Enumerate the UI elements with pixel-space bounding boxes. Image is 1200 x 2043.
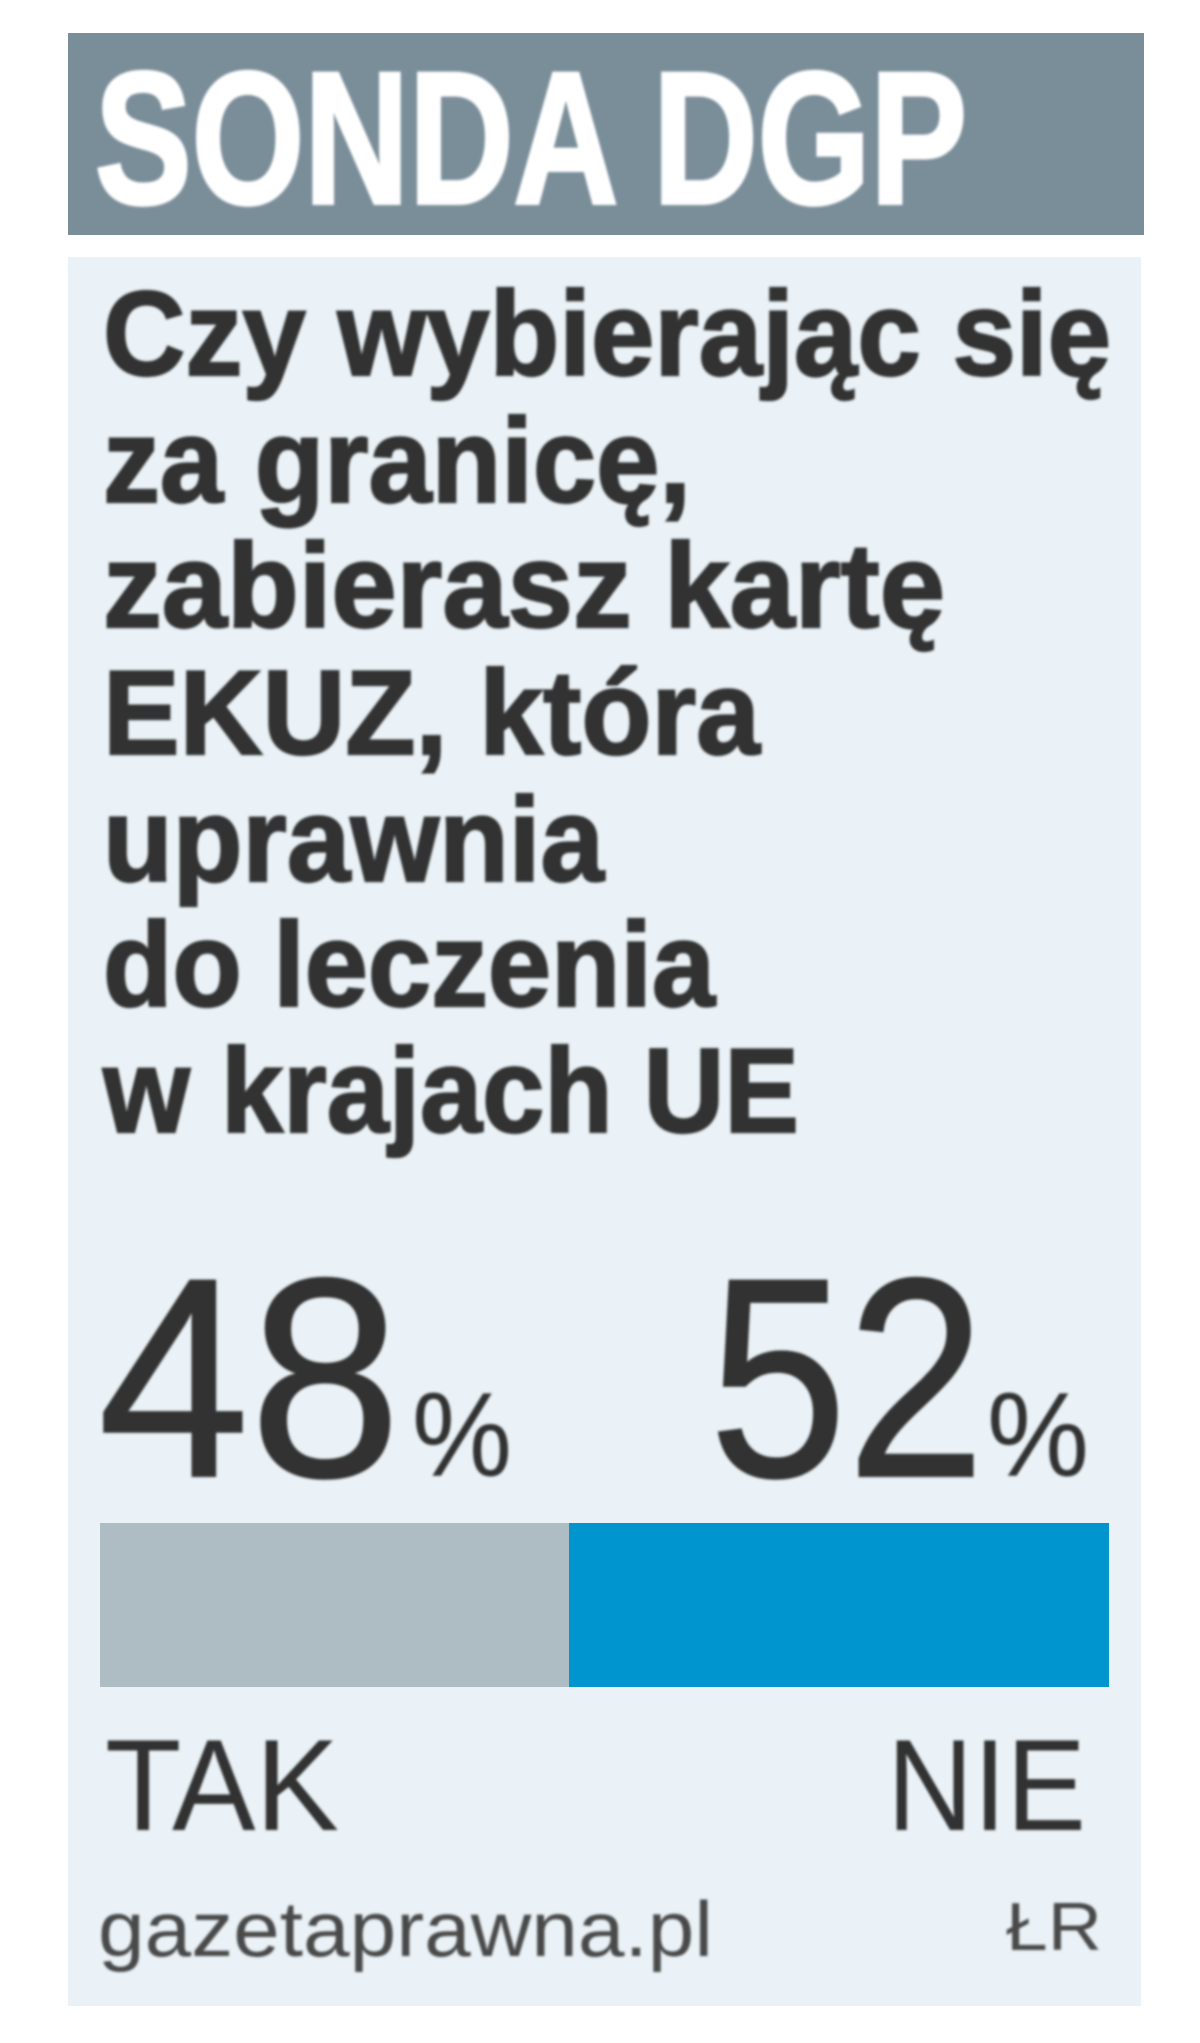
- header band: [68, 33, 1144, 243]
- question text: za granicę,: [103, 394, 691, 528]
- value: 52 percent: 52: [709, 1220, 985, 1537]
- stacked bar chart: [100, 1523, 1109, 1687]
- panel: poll content: [68, 257, 1141, 2006]
- question text: [102, 267, 1111, 1158]
- question text: do leczenia: [103, 898, 716, 1032]
- question text: uprawnia: [103, 773, 605, 907]
- value: 52 percent: %: [987, 1368, 1089, 1502]
- label: NIE: NIE: [887, 1712, 1086, 1858]
- source: gazetaprawna.pl: [98, 1885, 713, 1973]
- question text: w krajach UE: [102, 1024, 799, 1158]
- question text: EKUZ, która: [103, 646, 761, 780]
- question text: Czy wybierając się: [103, 267, 1111, 401]
- value: 48 percent: 48: [98, 1220, 401, 1537]
- author initials: ŁR: [1006, 1889, 1102, 1965]
- question text: zabierasz kartę: [103, 519, 945, 653]
- bar segment: NIE 52%: [569, 1523, 1109, 1687]
- bar segment: TAK 48%: [100, 1523, 569, 1687]
- title: SONDA DGP: [95, 33, 967, 243]
- label: TAK: TAK: [105, 1712, 339, 1858]
- value: 48 percent: %: [412, 1368, 512, 1502]
